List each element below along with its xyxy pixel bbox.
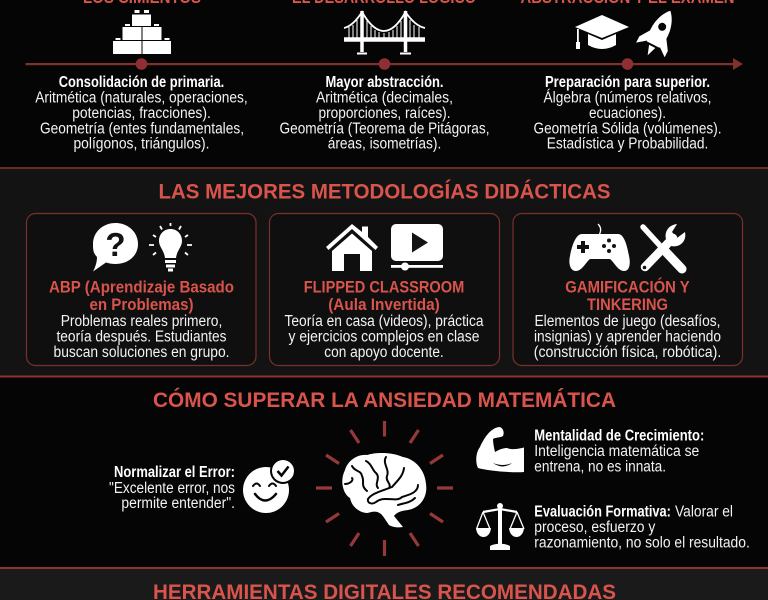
icon: muscle arm	[476, 427, 524, 472]
heading: metodologías: LAS MEJORES METODOLOGÍAS DIDÁCTICAS	[158, 180, 610, 204]
text block: mentalidad de crecimiento: Inteligencia matemática se	[534, 443, 699, 460]
card title	[49, 278, 234, 314]
icon: bridge	[344, 11, 425, 54]
icon: gamepad	[569, 224, 630, 271]
card text: con apoyo docente.	[324, 344, 444, 361]
text block: abstracción: Geometría (Teorema de Pitágoras,	[280, 120, 490, 138]
text block: evaluación formativa: Valorar el	[675, 504, 733, 520]
text block: normalizar el error: Normalizar el Error:	[114, 464, 235, 481]
card text	[54, 313, 230, 361]
text block: superior: Estadística y Probabilidad.	[547, 136, 708, 152]
icon: smiley	[243, 458, 296, 513]
arrow: timeline	[26, 58, 743, 70]
icon: blocks	[113, 10, 171, 54]
card text: buscan soluciones en grupo.	[54, 344, 230, 361]
card title: TINKERING	[587, 295, 668, 314]
text block: evaluación formativa	[534, 504, 750, 552]
text block: primaria: Aritmética (naturales, operaciones,	[35, 90, 248, 106]
icon: question bubble: ?	[105, 226, 126, 263]
panel: metodologías	[26, 180, 742, 366]
text block: normalizar el error	[109, 464, 235, 512]
text block: abstracción: proporciones, raíces).	[318, 105, 450, 122]
card title	[304, 278, 464, 314]
card text: y ejercicios complejos en clase	[288, 328, 480, 346]
icon: house	[326, 224, 378, 271]
icon: graduation cap	[575, 15, 629, 49]
card title: GAMIFICACIÓN Y	[565, 278, 690, 296]
icon: rocket	[633, 3, 685, 63]
text block: superior: Preparación para superior.	[545, 74, 710, 91]
icon: tools	[643, 224, 685, 269]
text block: primaria: Geometría (entes fundamentales,	[40, 120, 244, 138]
text block: superior: ecuaciones).	[589, 105, 666, 122]
text block: primaria: potencias, fracciones).	[72, 105, 211, 122]
text block: abstracción: Aritmética (decimales,	[316, 90, 453, 106]
card text	[534, 313, 721, 361]
card text: teoría después. Estudiantes	[56, 328, 227, 346]
icon: video player	[391, 224, 443, 270]
card text: (construcción física, robótica).	[534, 344, 721, 361]
text block: primaria: polígonos, triángulos).	[74, 136, 210, 152]
text block: evaluación formativa: Evaluación Formativa:	[534, 504, 671, 520]
text block: primaria	[35, 74, 248, 152]
card title: en Problemas)	[90, 295, 194, 314]
text block: abstracción	[280, 74, 490, 152]
panel: timeline	[26, 0, 743, 152]
panel: ansiedad	[109, 388, 750, 556]
card text	[284, 313, 484, 361]
text block: superior	[534, 74, 722, 152]
text block: evaluación formativa: proceso, esfuerzo y	[534, 519, 656, 536]
text block: mentalidad de crecimiento: Mentalidad de Crecimiento:	[534, 428, 704, 444]
card: flipped classroom	[270, 214, 500, 366]
card: ABP	[26, 214, 256, 366]
card text: Elementos de juego (desafíos,	[534, 313, 720, 330]
text block: superior: Geometría Sólida (volúmenes).	[534, 120, 722, 138]
card title: FLIPPED CLASSROOM	[304, 278, 464, 296]
text block: mentalidad de crecimiento: entrena, no es innata.	[534, 458, 666, 476]
card title: (Aula Invertida)	[328, 295, 440, 314]
icon: scales	[476, 503, 524, 550]
text block: normalizar el error: permite entender".	[121, 495, 235, 512]
card: gamificación	[513, 214, 742, 366]
card text: Problemas reales primero,	[61, 313, 222, 330]
icon: brain with rays	[316, 421, 453, 556]
card title: ABP (Aprendizaje Basado	[49, 278, 234, 296]
card text: insignias) y aprender haciendo	[534, 328, 721, 346]
card text: Teoría en casa (videos), práctica	[284, 313, 484, 330]
text block: mentalidad de crecimiento	[534, 428, 704, 476]
icon: question bubble	[93, 223, 138, 272]
text block: primaria: Consolidación de primaria.	[59, 74, 224, 91]
text block: abstracción: Mayor abstracción.	[326, 74, 444, 91]
icon: light bulb	[149, 223, 192, 272]
text block: normalizar el error: "Excelente error, nos	[109, 480, 235, 497]
text block: superior: Álgebra (números relativos,	[544, 90, 712, 106]
heading: ansiedad: CÓMO SUPERAR LA ANSIEDAD MATEMÁTICA	[153, 388, 616, 412]
text block: abstracción: áreas, isometrías).	[328, 136, 441, 152]
card title	[565, 278, 690, 314]
